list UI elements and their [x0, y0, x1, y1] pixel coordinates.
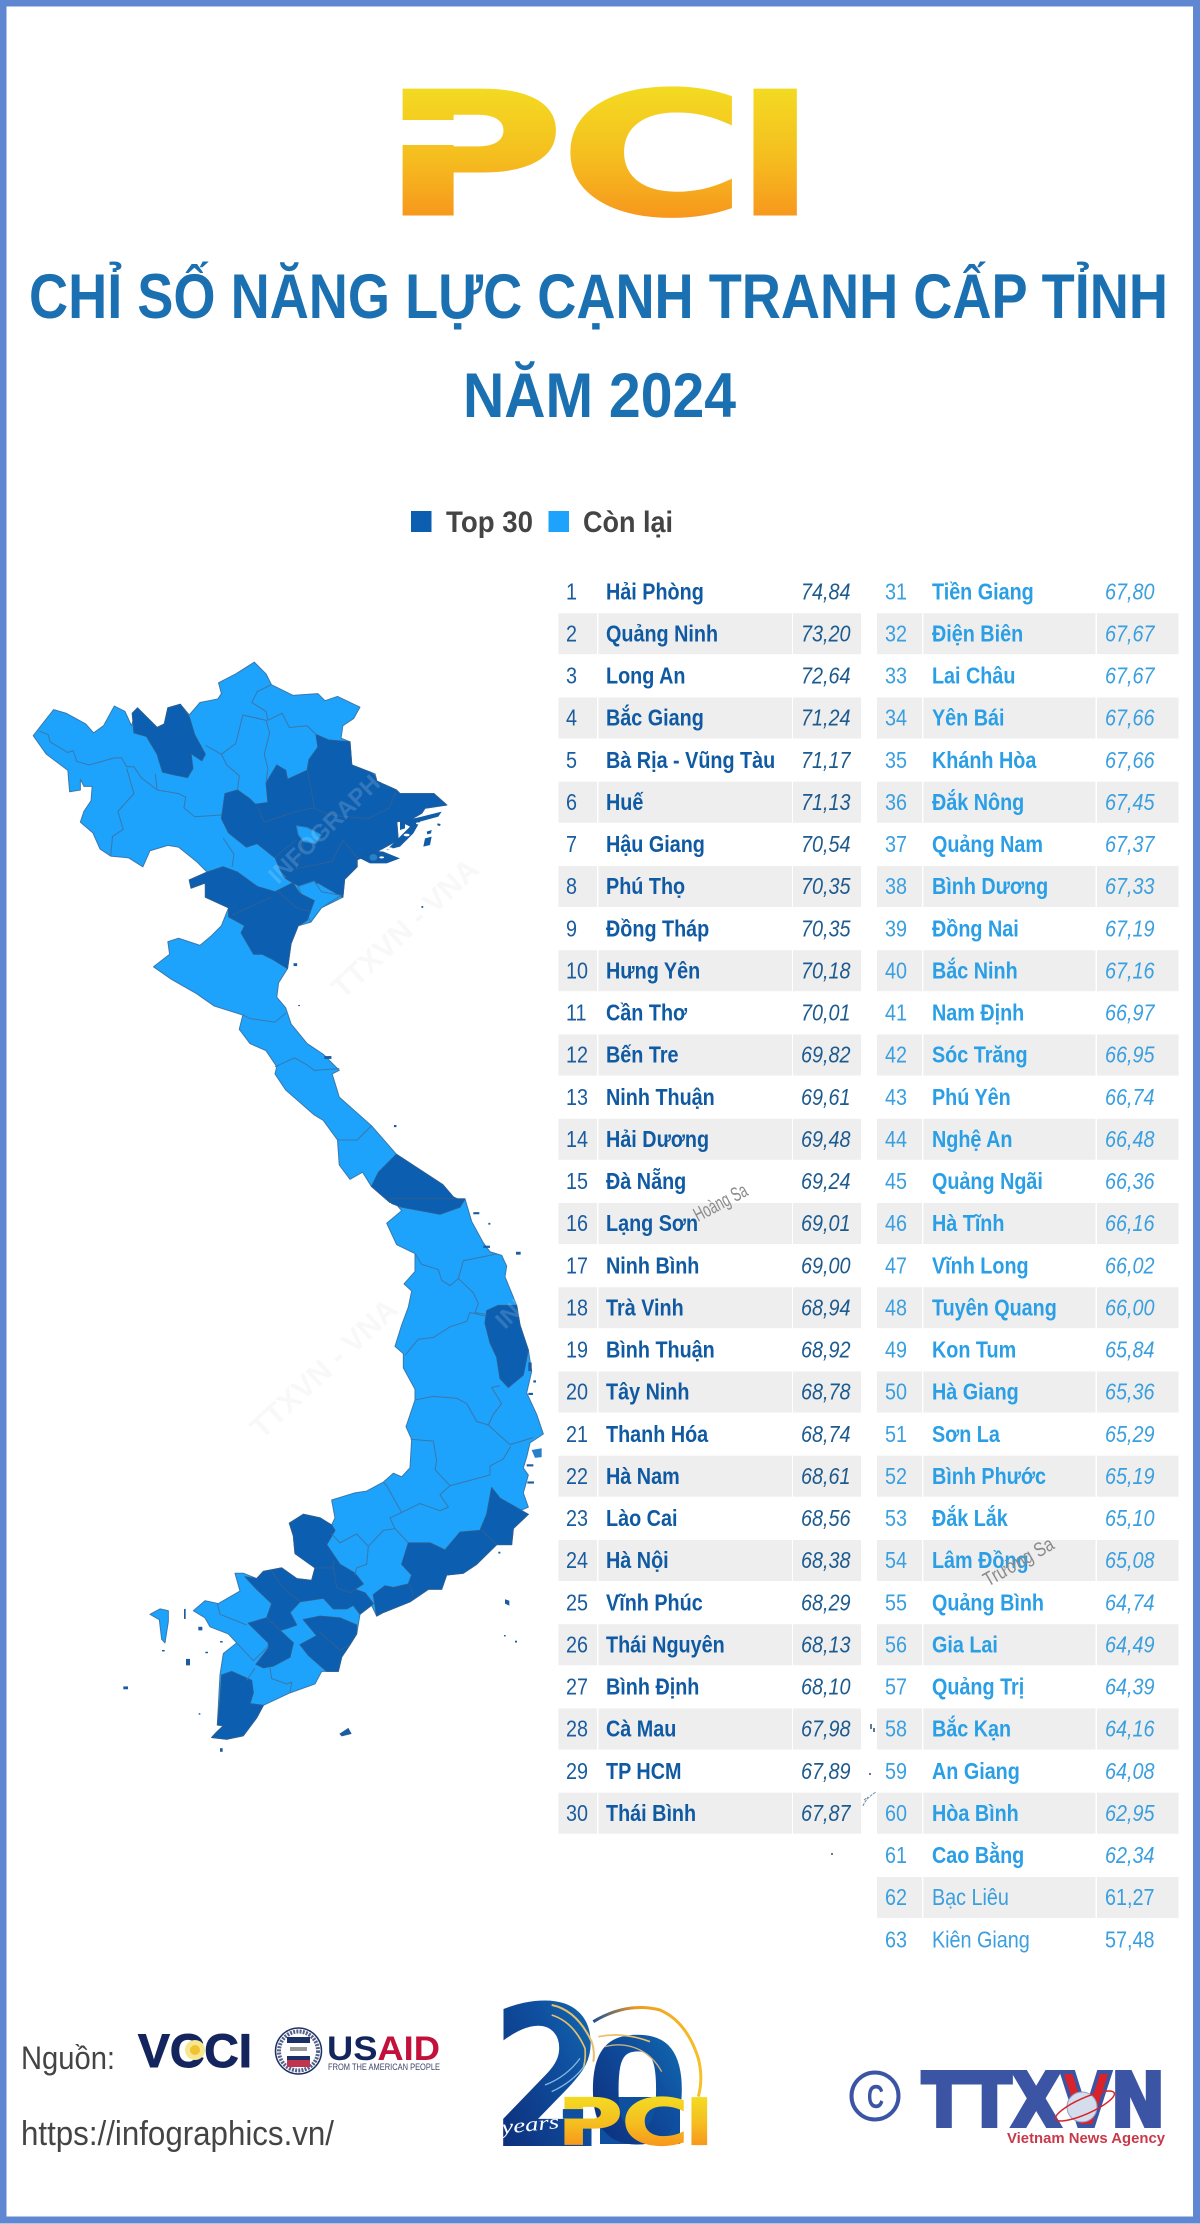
row 30: 30: [566, 1801, 588, 1826]
logo: PCI: I: [736, 57, 814, 255]
row 44: 66,48: [1105, 1127, 1155, 1152]
row 32: 67,67: [1105, 621, 1155, 647]
row 39: Đồng Nai: [932, 916, 1019, 942]
row 53: 65,10: [1105, 1506, 1155, 1531]
row 56: 56: [885, 1632, 907, 1658]
row 34: [877, 698, 1179, 738]
row 23: 23: [566, 1506, 588, 1531]
column: ranks 31 to 63: [877, 579, 1179, 1953]
row 51: 51: [885, 1421, 907, 1447]
row 24: 24: [566, 1548, 588, 1574]
row 25: 68,29: [801, 1590, 851, 1616]
row 57: 64,39: [1105, 1674, 1155, 1700]
row 51: 65,29: [1105, 1421, 1155, 1447]
row 38: [877, 866, 1179, 907]
row 1: Hải Phòng: [606, 579, 704, 605]
logo: 20 years PCI: C: [621, 2085, 689, 2160]
row 47: [885, 1253, 1155, 1279]
row 48: 66,00: [1105, 1295, 1155, 1321]
row 6: [558, 782, 861, 823]
row 3: 72,64: [801, 663, 851, 689]
label: Hoàng Sa: Hoàng Sa: [690, 1179, 752, 1226]
row 33: Lai Châu: [932, 663, 1015, 689]
row 5: [566, 747, 851, 773]
row 15: 69,24: [801, 1169, 851, 1194]
row 39: 39: [885, 916, 907, 942]
row 55: 55: [885, 1590, 907, 1616]
row 34: Yên Bái: [932, 705, 1004, 731]
row 13: 13: [566, 1085, 588, 1110]
row 11: 70,01: [801, 1000, 850, 1026]
row 4: [558, 698, 861, 738]
logo: PCI: P: [382, 57, 564, 255]
row 12: 12: [566, 1042, 588, 1068]
row 10: [558, 950, 861, 991]
row 40: 40: [885, 958, 907, 984]
row 14: [558, 1119, 861, 1160]
row 60: 62,95: [1105, 1801, 1155, 1826]
row 21: 68,74: [801, 1421, 851, 1447]
row 59: An Giang: [932, 1758, 1020, 1784]
row 28: [558, 1708, 861, 1750]
row 54: Lâm Đồng: [932, 1548, 1029, 1574]
row 29: 29: [566, 1758, 588, 1784]
watermark: TTXVN - VNA: TTXVN - VNA: [244, 1293, 405, 1445]
row 63: 63: [885, 1927, 907, 1953]
row 42: Sóc Trăng: [932, 1042, 1028, 1068]
row 14: Hải Dương: [606, 1127, 709, 1152]
row 56: 64,49: [1105, 1632, 1155, 1658]
row 32: Điện Biên: [932, 621, 1023, 647]
row 17: Ninh Bình: [606, 1253, 699, 1279]
row 30: Thái Bình: [606, 1801, 696, 1826]
row 1: [566, 579, 851, 605]
row 8: Phú Thọ: [606, 874, 685, 900]
row 49: 49: [885, 1337, 907, 1363]
row 63: 57,48: [1105, 1927, 1154, 1953]
row 15: Đà Nẵng: [606, 1168, 686, 1194]
row 44: 44: [885, 1127, 907, 1152]
logo: TTXVN: Vietnam News Agency: [1007, 2130, 1166, 2147]
row 15: 15: [566, 1169, 588, 1194]
row 7: [566, 832, 851, 857]
row 13: 69,61: [801, 1085, 850, 1110]
row 26: 26: [566, 1632, 588, 1658]
row 43: 66,74: [1105, 1085, 1155, 1110]
row 10: Hưng Yên: [606, 958, 700, 984]
row 33: 67,67: [1105, 663, 1155, 689]
row 50: Hà Giang: [932, 1379, 1019, 1405]
row 15: [566, 1168, 851, 1194]
row 16: 16: [566, 1211, 588, 1237]
row 9: 70,35: [801, 916, 851, 942]
row 1: 74,84: [801, 579, 851, 605]
row 6: 71,13: [801, 790, 851, 815]
row 2: [558, 613, 861, 654]
row 59: [885, 1758, 1155, 1784]
row 60: Hòa Bình: [932, 1801, 1019, 1826]
row 36: 67,45: [1105, 790, 1155, 815]
row 46: 46: [885, 1211, 907, 1237]
logo: TTXVN: TTXVN: [922, 2058, 1165, 2144]
row 48: Tuyên Quang: [932, 1295, 1057, 1321]
row 62: 61,27: [1105, 1885, 1154, 1911]
row 32: 32: [885, 621, 907, 647]
row 43: 43: [885, 1085, 907, 1110]
row 23: 68,56: [801, 1506, 851, 1531]
row 12: [558, 1034, 861, 1076]
row 29: [566, 1758, 851, 1784]
row 29: TP HCM: [606, 1758, 681, 1784]
row 34: 67,66: [1105, 705, 1155, 731]
row 56: Gia Lai: [932, 1632, 998, 1658]
row 25: Vĩnh Phúc: [606, 1590, 703, 1616]
source label: Nguồn:: [21, 2040, 115, 2076]
row 31: 67,80: [1105, 579, 1155, 605]
title: NĂM 2024: [463, 361, 736, 431]
row 17: 17: [566, 1253, 588, 1279]
row 18: [558, 1287, 861, 1328]
row 3: 3: [566, 663, 577, 689]
row 14: 14: [566, 1127, 588, 1152]
row 27: [566, 1674, 851, 1700]
row 29: 67,89: [801, 1758, 851, 1784]
row 33: 33: [885, 663, 907, 689]
row 46: Hà Tĩnh: [932, 1211, 1004, 1237]
row 58: Bắc Kạn: [932, 1715, 1011, 1742]
row 47: 66,02: [1105, 1253, 1155, 1279]
logo: USAID wordmark: USAID: [327, 2030, 440, 2068]
row 53: 53: [885, 1506, 907, 1531]
row 24: [558, 1540, 861, 1581]
row 49: [885, 1337, 1155, 1363]
legend: Top 30: [446, 506, 533, 539]
row 48: [877, 1287, 1179, 1328]
row 17: [566, 1253, 851, 1279]
logo: USAID seal: [276, 2028, 322, 2074]
row 26: 68,13: [801, 1632, 851, 1658]
row 28: 28: [566, 1716, 588, 1742]
logo: USAID wordmark: FROM THE AMERICAN PEOPLE: [328, 2062, 440, 2073]
row 19: [566, 1337, 851, 1363]
row 35: Khánh Hòa: [932, 747, 1037, 773]
row 26: [558, 1624, 861, 1665]
row 41: [885, 1000, 1155, 1026]
row 63: [885, 1927, 1154, 1953]
legend: Còn lại: [583, 506, 673, 539]
row 19: 19: [566, 1337, 588, 1363]
row 18: 18: [566, 1295, 588, 1321]
row 22: 68,61: [801, 1464, 850, 1489]
row 30: [558, 1793, 861, 1834]
row 37: 37: [885, 832, 907, 857]
logo: 20 years PCI: [490, 1965, 714, 2193]
row 8: 70,35: [801, 874, 851, 900]
row 49: Kon Tum: [932, 1337, 1016, 1363]
title: [29, 261, 1168, 431]
row 43: Phú Yên: [932, 1085, 1011, 1110]
row 36: 36: [885, 790, 907, 815]
row 45: [885, 1169, 1155, 1194]
row 50: 65,36: [1105, 1379, 1155, 1405]
logo: 20 years PCI: 0: [586, 2003, 690, 2176]
row 55: Quảng Bình: [932, 1590, 1044, 1616]
row 53: [885, 1505, 1155, 1531]
row 39: [885, 916, 1155, 942]
map: Ha Long bay islands: [360, 812, 442, 863]
row 4: 4: [566, 705, 577, 731]
row 61: 61: [885, 1843, 907, 1868]
row 21: [566, 1421, 851, 1447]
logo: PCI: C: [560, 56, 746, 254]
row 36: Đắk Nông: [932, 788, 1024, 815]
row 28: 67,98: [801, 1716, 851, 1742]
row 4: 71,24: [801, 705, 851, 731]
row 28: Cà Mau: [606, 1716, 676, 1742]
row 42: 42: [885, 1042, 907, 1068]
row 3: Long An: [606, 663, 685, 689]
row 41: 66,97: [1105, 1000, 1155, 1026]
row 19: 68,92: [801, 1337, 851, 1363]
row 20: 68,78: [801, 1379, 851, 1405]
row 61: 62,34: [1105, 1843, 1155, 1868]
watermark: TTXVN - VNA: TTXVN - VNA: [325, 853, 486, 1005]
row 48: 48: [885, 1295, 907, 1321]
label: Trường Sa: Trường Sa: [980, 1533, 1059, 1591]
row 35: [885, 747, 1155, 773]
row 5: Bà Rịa - Vũng Tàu: [606, 747, 775, 773]
row 8: [558, 866, 861, 907]
row 57: Quảng Trị: [932, 1674, 1024, 1700]
row 32: [877, 613, 1179, 654]
logo: PCI: [382, 56, 814, 255]
row 56: [877, 1624, 1179, 1665]
logo: 20 years PCI: 2: [490, 1965, 606, 2193]
column: ranks 1 to 30, Top 30: [558, 579, 861, 1834]
row 18: 68,94: [801, 1295, 851, 1321]
row 2: Quảng Ninh: [606, 621, 718, 647]
row 63: Kiên Giang: [932, 1927, 1030, 1953]
row 5: 5: [566, 747, 577, 773]
row 58: 58: [885, 1716, 907, 1742]
row 42: 66,95: [1105, 1042, 1155, 1068]
row 43: [885, 1085, 1155, 1110]
map of Vietnam: [33, 662, 876, 1855]
row 45: 66,36: [1105, 1169, 1155, 1194]
row 8: 8: [566, 874, 577, 900]
row 40: Bắc Ninh: [932, 957, 1018, 984]
row 57: [885, 1674, 1155, 1700]
row 13: [566, 1085, 850, 1110]
row 44: [877, 1119, 1179, 1160]
row 44: Nghệ An: [932, 1127, 1013, 1152]
row 51: [885, 1421, 1155, 1447]
logo: 20 years PCI: I: [685, 2085, 714, 2160]
row 52: Bình Phước: [932, 1464, 1046, 1489]
row 37: Quảng Nam: [932, 832, 1043, 857]
row 50: 50: [885, 1379, 907, 1405]
row 59: 64,08: [1105, 1758, 1155, 1784]
row 53: Đắk Lắk: [932, 1505, 1008, 1531]
row 31: [885, 579, 1155, 605]
row 51: Sơn La: [932, 1421, 1001, 1447]
row 46: [877, 1203, 1179, 1244]
row 11: Cần Thơ: [606, 1000, 688, 1026]
map: northern and central provinces: [33, 662, 465, 1202]
row 39: 67,19: [1105, 916, 1155, 942]
row 24: Hà Nội: [606, 1548, 669, 1574]
row 10: 10: [566, 958, 588, 984]
row 11: [566, 1000, 850, 1026]
row 16: 69,01: [801, 1211, 850, 1237]
row 41: 41: [885, 1000, 907, 1026]
row 25: [566, 1590, 851, 1616]
row 21: 21: [566, 1421, 588, 1447]
source url: https://infographics.vn/: [21, 2115, 335, 2153]
row 20: Tây Ninh: [606, 1379, 690, 1405]
row 50: [877, 1372, 1179, 1412]
row 36: [877, 782, 1179, 823]
row 46: 66,16: [1105, 1211, 1155, 1237]
row 2: 2: [566, 621, 577, 647]
row 19: Bình Thuận: [606, 1337, 715, 1363]
row 60: [877, 1793, 1179, 1834]
row 40: 67,16: [1105, 958, 1155, 984]
row 37: [885, 832, 1155, 857]
row 9: 9: [566, 916, 577, 942]
row 38: 67,33: [1105, 874, 1155, 900]
row 35: 35: [885, 747, 907, 773]
row 9: Đồng Tháp: [606, 916, 709, 942]
legend: [411, 506, 673, 539]
row 34: 34: [885, 705, 907, 731]
row 6: Huế: [606, 790, 643, 815]
logo: 20 years PCI: years: [498, 2111, 560, 2139]
row 25: 25: [566, 1590, 588, 1616]
row 7: 70,54: [801, 832, 851, 857]
watermark: TTXVN - VNA: INFOGRAPHICS: [490, 1187, 642, 1334]
row 14: 69,48: [801, 1127, 851, 1152]
row 13: Ninh Thuận: [606, 1085, 715, 1110]
islands: Hoàng Sa and Trường Sa specks: [831, 1724, 876, 1855]
row 62: [877, 1877, 1179, 1918]
icon: copyright: [852, 2072, 898, 2120]
row 27: 27: [566, 1674, 588, 1700]
row 33: [885, 663, 1155, 689]
row 35: 67,66: [1105, 747, 1155, 773]
logo: VCCI: VCCI: [138, 2024, 252, 2077]
row 61: [885, 1842, 1155, 1868]
row 23: Lào Cai: [606, 1506, 677, 1531]
map: southern provinces: [123, 1199, 543, 1752]
row 5: 71,17: [801, 747, 851, 773]
row 22: Hà Nam: [606, 1464, 680, 1489]
row 41: Nam Định: [932, 1000, 1024, 1026]
row 49: 65,84: [1105, 1337, 1155, 1363]
row 61: Cao Bằng: [932, 1842, 1024, 1868]
row 31: Tiền Giang: [932, 579, 1034, 605]
row 45: 45: [885, 1169, 907, 1194]
row 12: Bến Tre: [606, 1042, 679, 1068]
row 22: 22: [566, 1464, 588, 1489]
row 4: Bắc Giang: [606, 704, 704, 731]
row 16: [558, 1203, 861, 1244]
row 21: Thanh Hóa: [606, 1421, 709, 1447]
row 45: Quảng Ngãi: [932, 1169, 1043, 1194]
row 7: Hậu Giang: [606, 832, 705, 857]
row 38: Bình Dương: [932, 874, 1048, 900]
row 22: [558, 1456, 861, 1497]
watermark: TTXVN - VNA: [244, 742, 642, 1445]
row 9: [566, 916, 851, 942]
row 58: 64,16: [1105, 1716, 1155, 1742]
row 52: 65,19: [1105, 1464, 1155, 1489]
row 52: 52: [885, 1464, 907, 1489]
row 12: 69,82: [801, 1042, 851, 1068]
row 20: 20: [566, 1379, 588, 1405]
row 58: [877, 1708, 1179, 1750]
row 30: 67,87: [801, 1801, 851, 1826]
row 26: Thái Nguyên: [606, 1632, 725, 1658]
row 54: [877, 1540, 1179, 1581]
row 2: 73,20: [801, 621, 851, 647]
row 20: [558, 1372, 861, 1412]
row 60: 60: [885, 1801, 907, 1826]
row 55: [885, 1590, 1155, 1616]
row 17: 69,00: [801, 1253, 851, 1279]
row 7: 7: [566, 832, 577, 857]
row 47: 47: [885, 1253, 907, 1279]
row 38: 38: [885, 874, 907, 900]
row 10: 70,18: [801, 958, 851, 984]
row 24: 68,38: [801, 1548, 851, 1574]
row 55: 64,74: [1105, 1590, 1155, 1616]
watermark: TTXVN - VNA: INFOGRAPHICS: [263, 742, 415, 889]
row 27: Bình Định: [606, 1674, 699, 1700]
row 3: [566, 663, 851, 689]
row 27: 68,10: [801, 1674, 851, 1700]
row 16: Lạng Sơn: [606, 1211, 698, 1237]
row 1: 1: [566, 579, 577, 605]
row 37: 67,37: [1105, 832, 1155, 857]
row 42: [877, 1034, 1179, 1076]
row 62: 62: [885, 1885, 907, 1911]
row 23: [566, 1506, 851, 1531]
row 52: [877, 1456, 1179, 1497]
icon: copyright: C: [867, 2078, 884, 2115]
row 59: 59: [885, 1758, 907, 1784]
row 57: 57: [885, 1674, 907, 1700]
row 18: Trà Vinh: [606, 1295, 684, 1321]
logo: 20 years PCI: P: [557, 2086, 623, 2160]
row 31: 31: [885, 579, 907, 605]
row 62: Bạc Liêu: [932, 1885, 1009, 1911]
row 11: 11: [566, 1000, 586, 1026]
row 40: [877, 950, 1179, 991]
row 47: Vĩnh Long: [932, 1253, 1029, 1279]
row 54: 65,08: [1105, 1548, 1155, 1574]
row 54: 54: [885, 1548, 907, 1574]
ranking table: [558, 579, 1179, 1953]
row 6: 6: [566, 790, 577, 815]
